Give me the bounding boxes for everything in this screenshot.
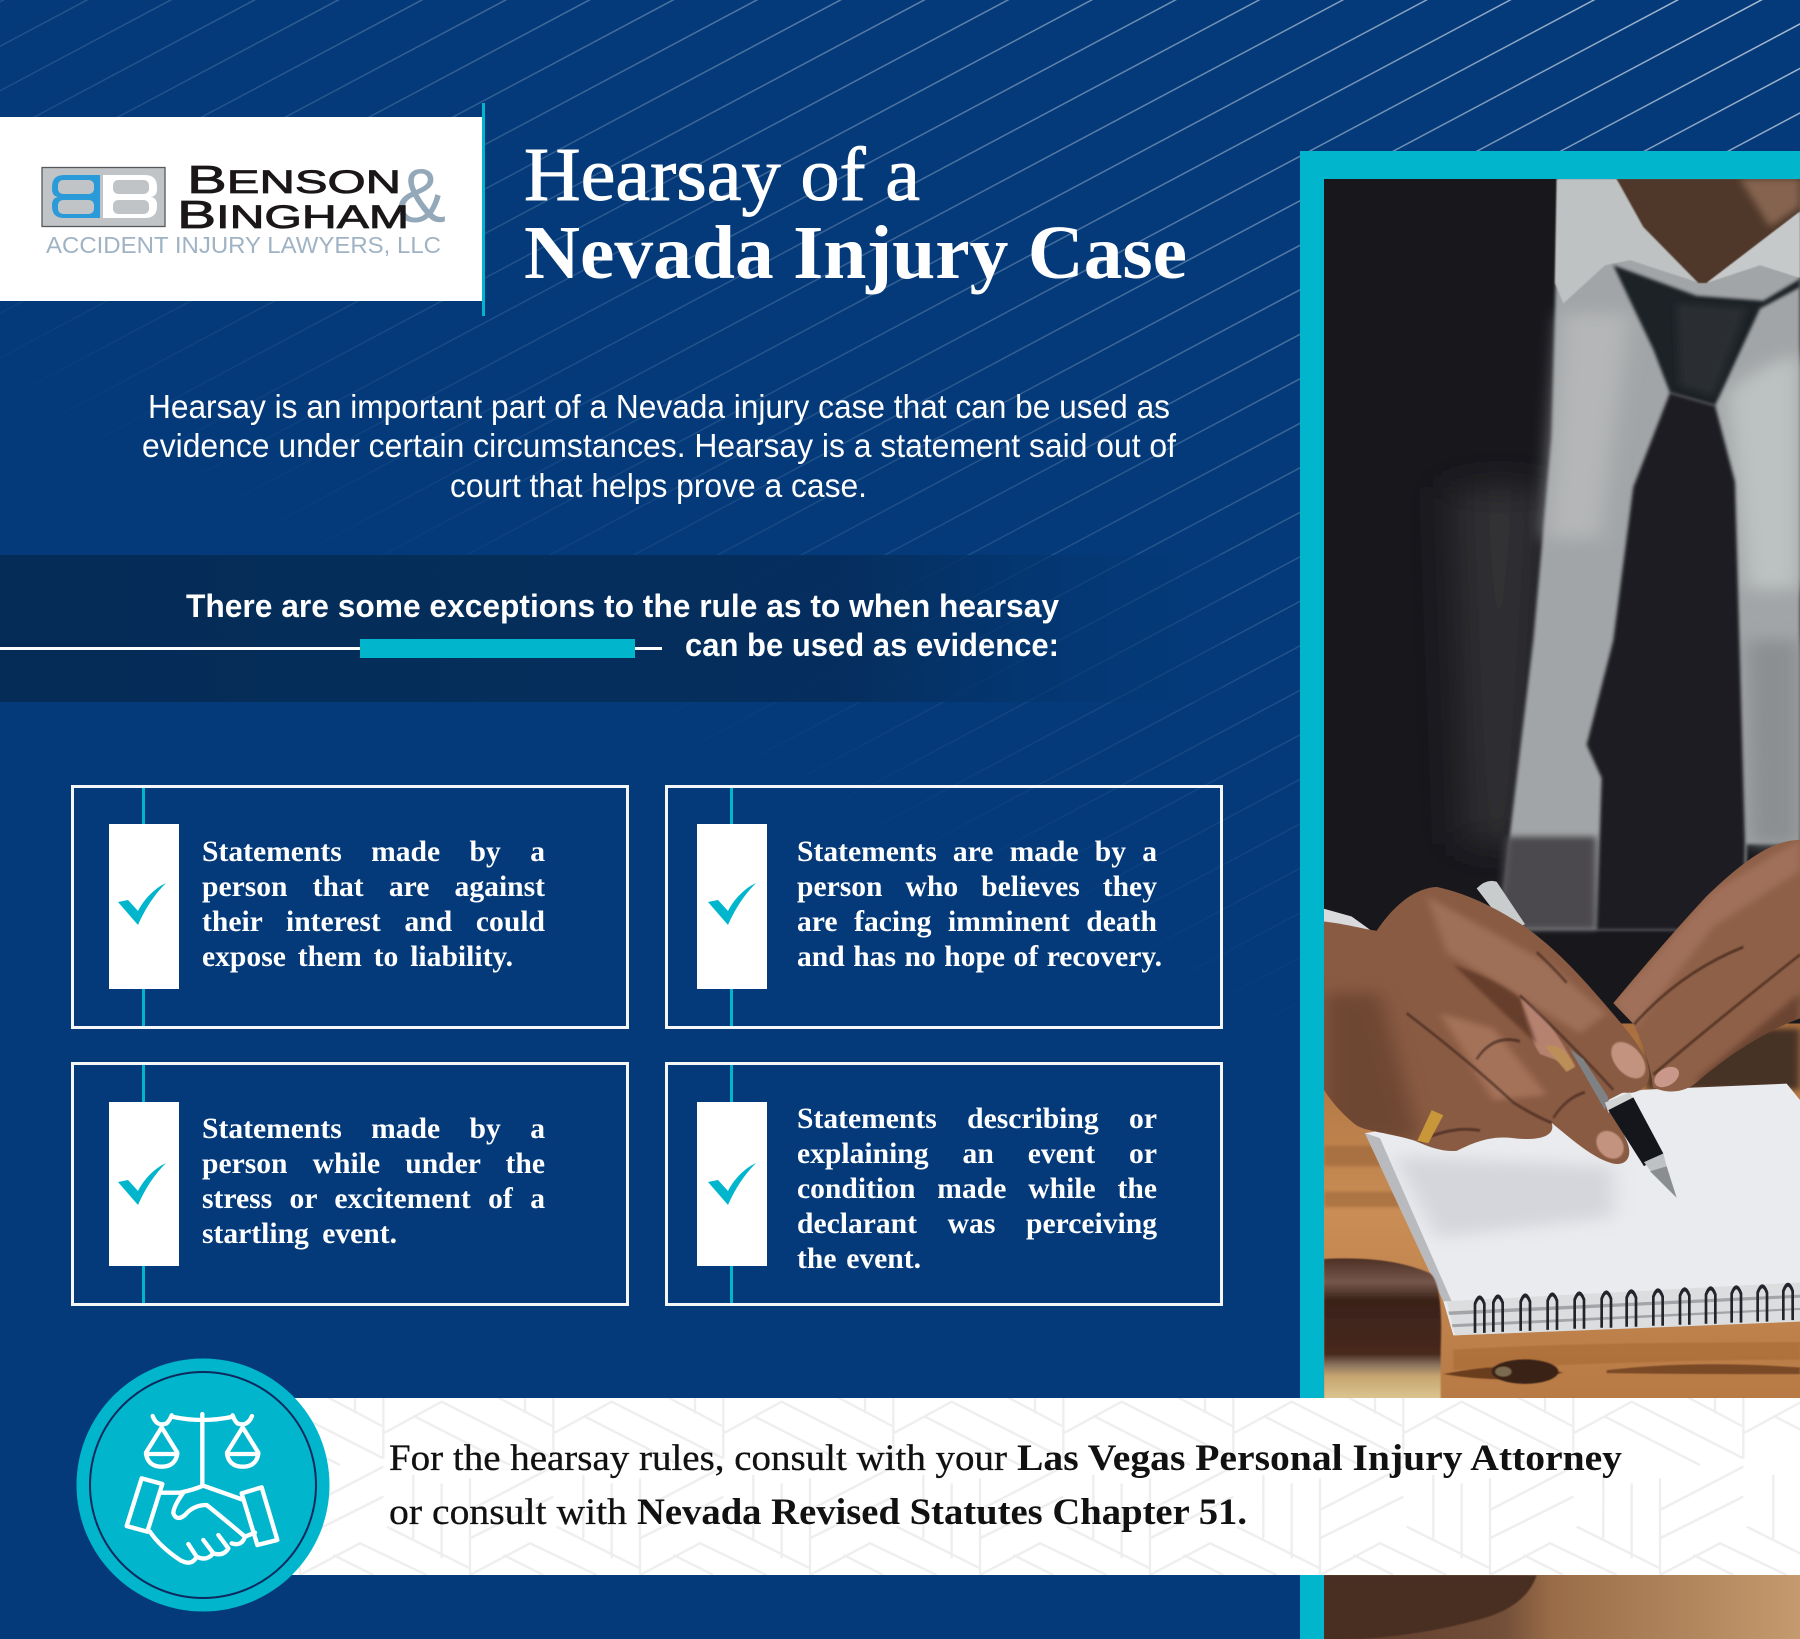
photo: lawyer writing on notebook: [1300, 151, 1800, 1639]
title: Hearsay of a: [524, 133, 920, 217]
gavel head: [1324, 1258, 1441, 1399]
logo wordmark: [177, 159, 409, 237]
logo wordmark: B INGHAM: [177, 194, 409, 237]
text: card 1: person that are against: [202, 871, 545, 903]
logo ampersand: &: [396, 154, 446, 239]
footer text: Nevada Revised Statutes Chapter 51.: [637, 1492, 1247, 1533]
icon: check mark: [708, 883, 756, 925]
desk below band: [1324, 1574, 1800, 1639]
banner: exceptions intro: can be used as evidence:: [685, 627, 1059, 663]
text: card 2: Statements are made by a: [797, 836, 1157, 868]
banner: exceptions intro: [0, 555, 1222, 702]
text: card 3: stress or excitement of a: [202, 1183, 545, 1215]
text: card 4: the event.: [797, 1243, 921, 1275]
text: card 2: [797, 836, 1162, 973]
notebook spiral rings: [1475, 1285, 1793, 1333]
text: card 3: person while under the: [202, 1148, 545, 1180]
icon: BB monogram: [42, 168, 165, 226]
text: card 2: and has no hope of recovery.: [797, 941, 1162, 973]
pen: [1570, 1049, 1608, 1110]
pen top: [1476, 880, 1525, 926]
card: imminent death: [665, 785, 1223, 1029]
photo frame: [1300, 151, 1800, 1639]
intro paragraph: court that helps prove a case.: [450, 467, 867, 504]
icon: scales and handshake badge: [76, 1358, 330, 1612]
banner: exceptions intro: There are some exceptions to the rule as to when hearsay: [186, 588, 1059, 624]
text: card 2: are facing imminent death: [797, 906, 1157, 938]
notebook: [1365, 1084, 1800, 1335]
text: card 4: condition made while the: [797, 1173, 1157, 1205]
desk: [1324, 1023, 1800, 1401]
text: card 4: [797, 1103, 1157, 1275]
text: card 4: explaining an event or: [797, 1138, 1157, 1170]
text: card 1: expose them to liability.: [202, 941, 513, 973]
logo wordmark: B ENSON: [187, 159, 401, 202]
footer text: [389, 1438, 1623, 1533]
text: card 1: [202, 836, 545, 973]
card: statement against interest: [71, 785, 629, 1029]
icon: check mark: [118, 1163, 166, 1205]
title: [524, 133, 1187, 295]
footer band: [290, 1398, 1800, 1575]
text: card 4: declarant was perceiving: [797, 1208, 1157, 1240]
footer text: or consult with: [389, 1492, 628, 1533]
logo tagline: ACCIDENT INJURY LAWYERS, LLC: [46, 232, 441, 258]
text: card 1: their interest and could: [202, 906, 545, 938]
text: card 3: Statements made by a: [202, 1113, 545, 1145]
card: perceiving an event: [665, 1062, 1223, 1306]
icon: check mark: [118, 883, 166, 925]
icon: handshake: [127, 1478, 277, 1563]
text: card 4: Statements describing or: [797, 1103, 1157, 1135]
wedding ring: [1417, 1110, 1443, 1143]
text: card 3: [202, 1113, 545, 1250]
logo panel: [0, 103, 485, 316]
background diagonal stripes: [0, 0, 1800, 924]
footer text: Las Vegas Personal Injury Attorney: [1017, 1438, 1623, 1479]
footer text: For the hearsay rules, consult with your: [389, 1438, 1007, 1479]
intro paragraph: [142, 388, 1177, 504]
title: Nevada Injury Case: [524, 211, 1187, 295]
shirt cuff: [1324, 908, 1370, 930]
intro paragraph: Hearsay is an important part of a Nevada injury case that can be used as: [148, 388, 1170, 425]
text: card 1: Statements made by a: [202, 836, 545, 868]
icon: scales: [146, 1414, 258, 1485]
text: card 3: startling event.: [202, 1218, 397, 1250]
text: card 2: person who believes they: [797, 871, 1157, 903]
card: startling event: [71, 1062, 629, 1306]
intro paragraph: evidence under certain circumstances. Hearsay is a statement said out of: [142, 427, 1177, 464]
icon: check mark: [708, 1163, 756, 1205]
